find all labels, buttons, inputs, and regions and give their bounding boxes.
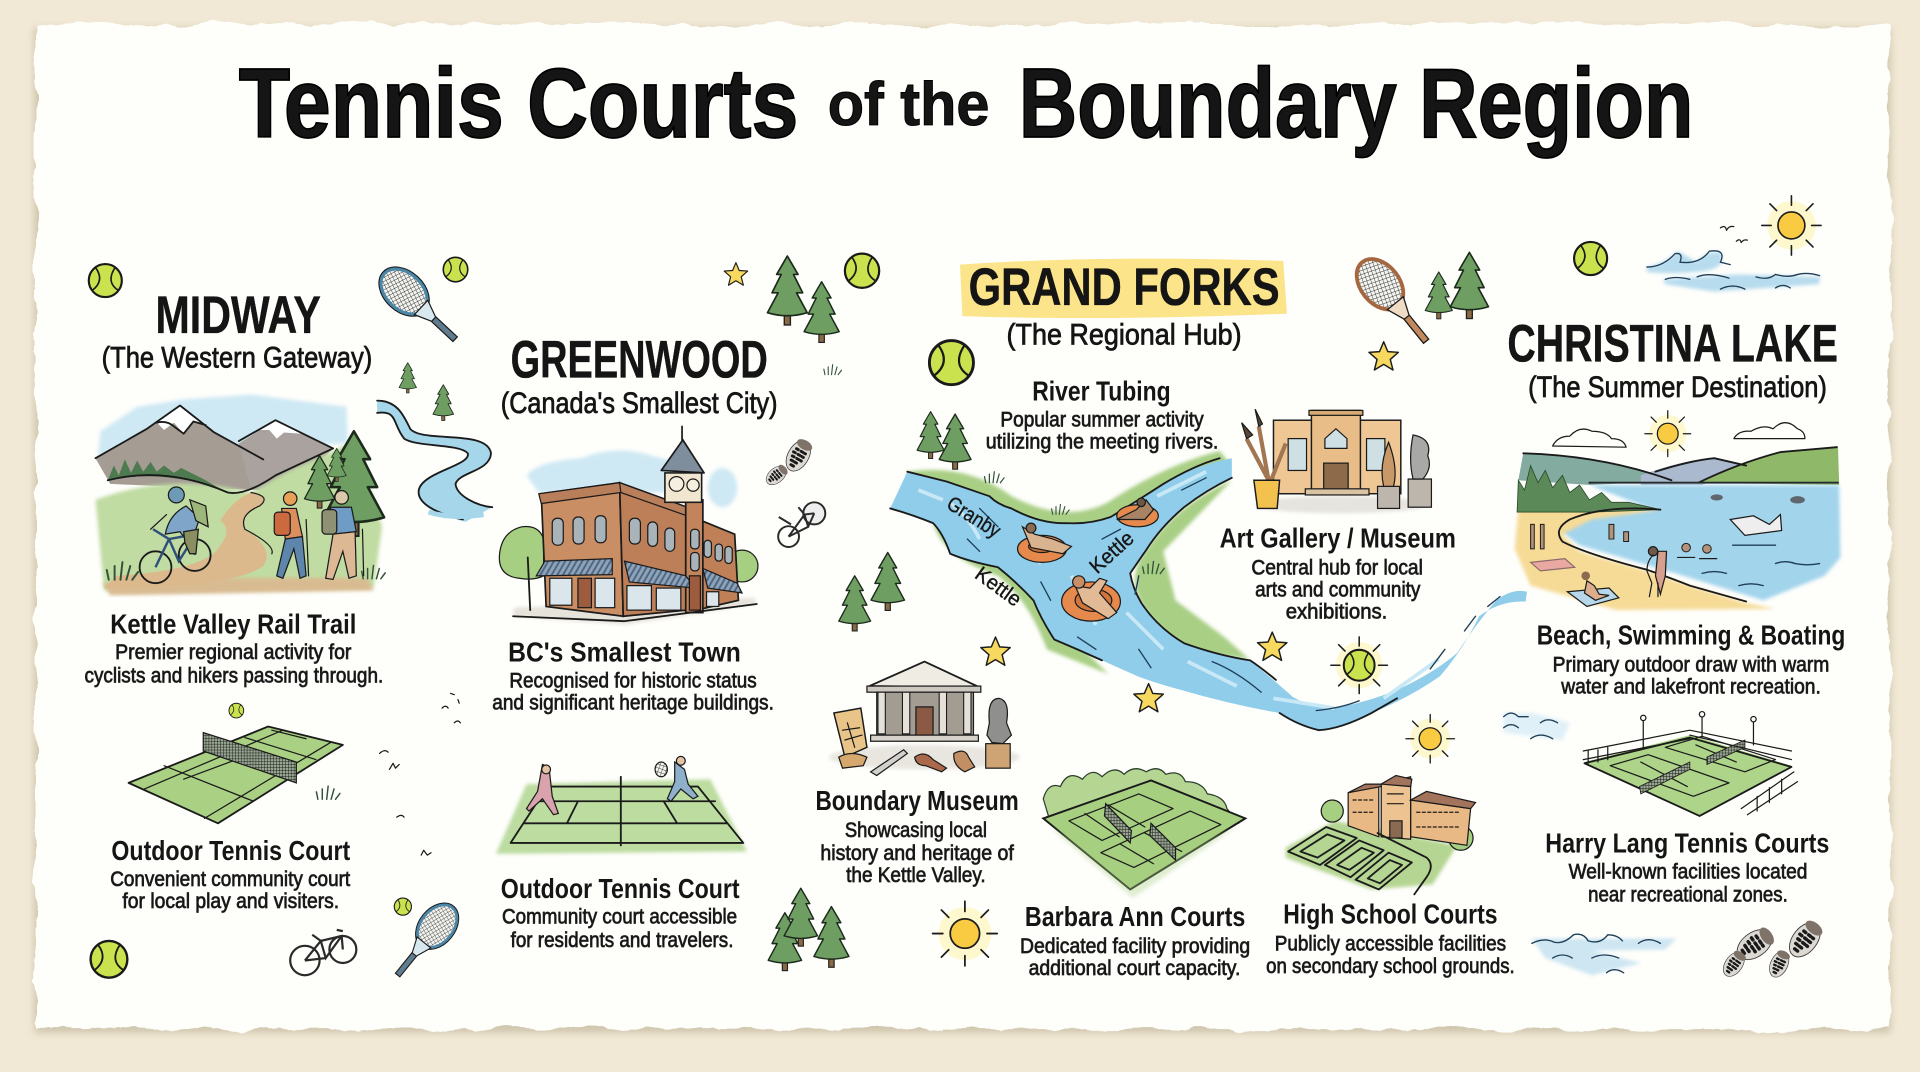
- illustration: cyclist and hikers on rail trail: [96, 394, 385, 595]
- text: Midway outdoor tennis court: Convenient community court: [110, 867, 350, 891]
- icon: tennis ball near racket: [443, 257, 468, 282]
- icon: waves lower: [1532, 934, 1676, 975]
- illustration: high school with courts: [1286, 776, 1476, 894]
- title: of the: [828, 70, 989, 138]
- text: Art Gallery / Museum: arts and community: [1255, 578, 1421, 602]
- heading: Greenwood: GREENWOOD: [511, 330, 768, 389]
- icon: tennis ball central: [929, 341, 973, 385]
- illustration: lake, beach and boat: [1515, 411, 1840, 610]
- icon: small waves: [1504, 713, 1570, 740]
- text: Barbara Ann Courts: Barbara Ann Courts: [1025, 900, 1245, 932]
- river label: Kettle east: Kettle: [1085, 527, 1139, 578]
- illustration: Boundary Museum with artifacts: [829, 662, 1020, 776]
- text: Barbara Ann Courts: additional court capacity.: [1029, 956, 1240, 980]
- icon: footprints lower right: [1719, 916, 1827, 980]
- panel: Grand Forks: [816, 258, 1527, 980]
- icon: sun lower: [933, 901, 997, 966]
- icon: mid trees: [839, 553, 904, 631]
- text: Kettle Valley Rail Trail: Premier regional activity for: [115, 640, 351, 664]
- heading: Greenwood: (Canada's Smallest City): [501, 387, 778, 420]
- text: Midway outdoor tennis court: for local play and visiters.: [122, 889, 339, 913]
- text: Harry Lang Tennis Courts: [1545, 827, 1829, 907]
- text: BC's Smallest Town: Recognised for historic status: [509, 668, 757, 692]
- text: Midway outdoor tennis court: [110, 834, 351, 913]
- icon: tennis ball lower left: [91, 941, 127, 978]
- heading: Christina Lake: [1507, 314, 1838, 404]
- icon: racket orange: [1347, 250, 1441, 353]
- text: Greenwood outdoor tennis court: Outdoor Tennis Court: [501, 872, 740, 904]
- text: BC's Smallest Town: BC's Smallest Town: [508, 636, 741, 668]
- heading: Midway: (The Western Gateway): [102, 342, 372, 375]
- icon: big sun: [1762, 196, 1821, 255]
- text: Beach, Swimming & Boating: Primary outdoor draw with warm: [1553, 652, 1829, 676]
- text: Harry Lang Tennis Courts: near recreational zones.: [1588, 883, 1788, 907]
- text: Barbara Ann Courts: Dedicated facility providing: [1020, 934, 1250, 958]
- icon: tennis ball top: [845, 254, 879, 288]
- icon: racket upper: [369, 257, 469, 354]
- icon: trees by river: [917, 412, 971, 469]
- icon: tennis ball upper left: [89, 264, 122, 297]
- text: Boundary Museum: the Kettle Valley.: [846, 863, 986, 887]
- illustration: art gallery: [1242, 409, 1431, 513]
- text: Beach, Swimming & Boating: [1537, 618, 1845, 698]
- title: Tennis Courts: [239, 48, 798, 158]
- illustration: Harry Lang tennis courts: [1583, 712, 1798, 817]
- text: Boundary Museum: Showcasing local: [845, 818, 987, 842]
- heading: Midway: [102, 286, 372, 375]
- heading: Greenwood: [501, 330, 778, 420]
- text: High School Courts: High School Courts: [1283, 898, 1498, 930]
- text: Art Gallery / Museum: Central hub for local: [1251, 556, 1423, 580]
- text: Harry Lang Tennis Courts: Well-known facilities located: [1569, 859, 1807, 883]
- decorations: Greenwood to Grand Forks: [724, 254, 1398, 971]
- map: river confluence with tubers: [890, 451, 1527, 730]
- text: High School Courts: on secondary school grounds.: [1266, 954, 1515, 978]
- heading: Midway: MIDWAY: [156, 286, 321, 345]
- scattered trail marks: [380, 693, 460, 855]
- text: Beach, Swimming & Boating: Beach, Swimming & Boating: [1537, 618, 1845, 650]
- text: River Tubing: River Tubing: [1032, 375, 1171, 407]
- icon: upper trees: [767, 256, 839, 342]
- text: Harry Lang Tennis Courts: Harry Lang Tennis Courts: [1545, 827, 1829, 859]
- text: Greenwood outdoor tennis court: for residents and travelers.: [511, 928, 733, 952]
- text: Kettle Valley Rail Trail: [84, 607, 383, 687]
- illustration: Barbara Ann courts: [1043, 769, 1245, 898]
- title: [239, 48, 1693, 158]
- text: Boundary Museum: Boundary Museum: [816, 784, 1019, 816]
- text: High School Courts: [1266, 898, 1515, 978]
- grass tuft: [824, 365, 841, 375]
- title: Boundary Region: [1019, 48, 1693, 158]
- text: Art Gallery / Museum: exhibitions.: [1286, 600, 1387, 624]
- text: River Tubing: Popular summer activity: [1000, 407, 1204, 431]
- text: BC's Smallest Town: [492, 636, 774, 714]
- text: Art Gallery / Museum: Art Gallery / Museum: [1220, 522, 1456, 554]
- heading: Grand Forks with yellow highlight: (The Regional Hub): [1007, 318, 1242, 351]
- icon: star upper: [724, 263, 748, 285]
- icon: birds: [1720, 226, 1747, 243]
- panel: Christina Lake: [1504, 314, 1845, 980]
- text: Midway outdoor tennis court: Outdoor Tennis Court: [111, 834, 351, 866]
- text: Barbara Ann Courts: [1020, 900, 1250, 980]
- icon: tennis ball lower small: [394, 898, 411, 915]
- text: High School Courts: Publicly accessible facilities: [1275, 932, 1506, 956]
- text: Greenwood outdoor tennis court: Community court accessible: [502, 905, 737, 929]
- icon: footprints: [763, 436, 816, 489]
- text: Boundary Museum: [816, 784, 1019, 887]
- icon: bicycle lower: [290, 930, 356, 975]
- river label: Kettle west: Kettle: [971, 562, 1026, 611]
- icon: racket lower: [383, 895, 468, 987]
- icon: tennis ball sun: [1331, 637, 1387, 694]
- text: Kettle Valley Rail Trail: Kettle Valley Rail Trail: [110, 607, 356, 639]
- heading: Christina Lake: (The Summer Destination): [1528, 371, 1827, 404]
- heading: Grand Forks with yellow highlight: [960, 258, 1287, 351]
- decorations: Midway and Greenwood margin: [89, 257, 841, 987]
- icon: trees near racket: [1425, 252, 1488, 319]
- panel: Greenwood: [492, 330, 778, 952]
- text: Greenwood outdoor tennis court: [501, 872, 740, 952]
- text: Art Gallery / Museum: [1220, 522, 1456, 624]
- panel: Midway: [84, 286, 385, 913]
- icon: lower trees: [768, 888, 849, 971]
- icon: bicycle by greenwood: [778, 502, 825, 547]
- illustration: historic brick building with clock tower: [499, 426, 758, 625]
- text: Beach, Swimming & Boating: water and lakefront recreation.: [1560, 674, 1821, 698]
- winding stream: [377, 401, 492, 522]
- text: River Tubing: [986, 375, 1218, 453]
- text: Kettle Valley Rail Trail: cyclists and hikers passing through.: [84, 663, 383, 687]
- decorations: upper right: [1347, 196, 1821, 353]
- illustration: court with two players: [496, 756, 747, 854]
- illustration: outdoor court: [129, 703, 343, 823]
- heading: Grand Forks with yellow highlight: GRAND FORKS: [969, 258, 1280, 317]
- icon: sun above school: [1406, 715, 1454, 763]
- icon: tennis ball right: [1574, 242, 1607, 275]
- river label: Granby: Granby: [943, 492, 1005, 543]
- icon: ocean waves: [1647, 251, 1821, 292]
- icon: stars around river: [981, 342, 1398, 712]
- text: Boundary Museum: history and heritage of: [820, 841, 1014, 865]
- icon: trees by stream: [399, 363, 454, 421]
- text: BC's Smallest Town: and significant heritage buildings.: [492, 690, 774, 714]
- text: River Tubing: utilizing the meeting rivers.: [986, 429, 1218, 453]
